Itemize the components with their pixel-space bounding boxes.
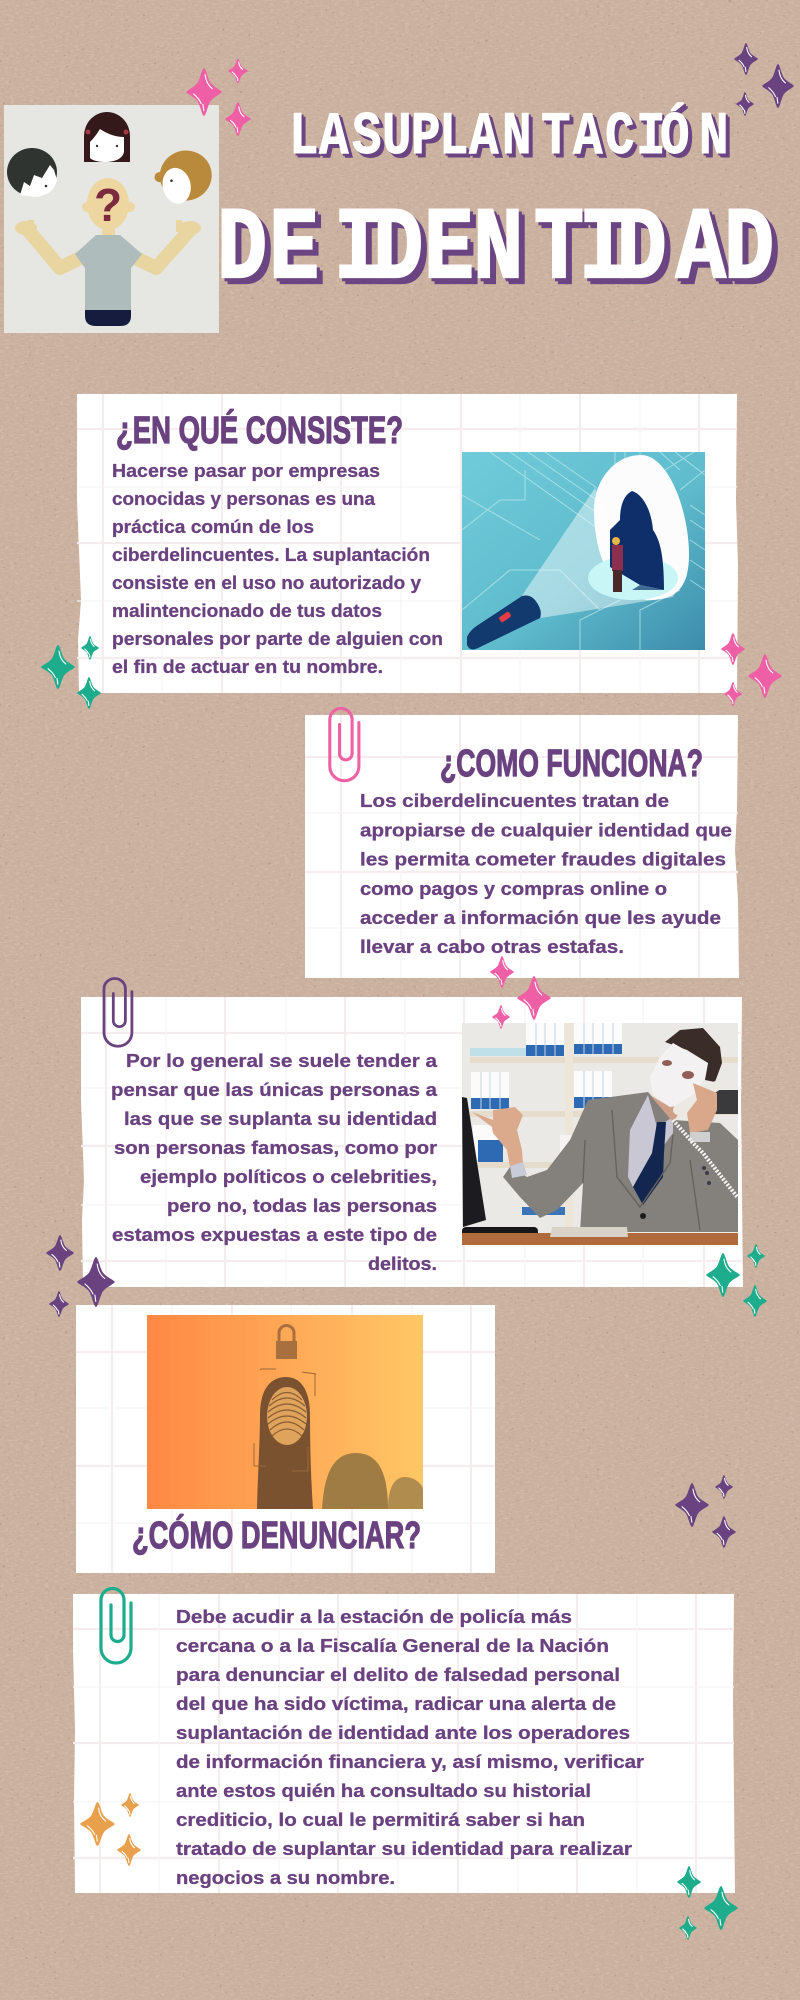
text block: Hacerse pasar por empresas [112, 460, 380, 481]
icon: right face [150, 146, 217, 207]
sparkles: green, card one left [41, 636, 101, 709]
text block: crediticio, lo cual le permitirá saber si han [176, 1809, 585, 1830]
icon: hands [15, 220, 201, 235]
text block: como pagos y compras online o [360, 878, 667, 899]
text block: de información financiera y, así mismo, verificar [176, 1751, 644, 1772]
illustration: flashlight revealing hooded figure [462, 445, 705, 650]
icon: arms [28, 230, 190, 268]
text block: conocidas y personas es una [112, 488, 376, 509]
photo: man in suit with white mask on the phone [462, 1023, 738, 1245]
text block [111, 1050, 438, 1274]
text block: el fin de actuar en tu nombre. [112, 656, 383, 677]
text block [112, 460, 443, 677]
text block: Los ciberdelincuentes tratan de [360, 790, 669, 811]
text block: consiste en el uso no autorizado y [112, 572, 422, 593]
sparkles: green, bottom [677, 1866, 738, 1940]
text block: cercana o a la Fiscalía General de la Nación [176, 1635, 609, 1656]
title line 1: LASUPLANTACIÓN [289, 102, 728, 172]
photo: fingerprint scan with padlock [147, 1315, 423, 1509]
text block: práctica común de los [112, 516, 314, 537]
text block: Debe acudir a la estación de policía más [176, 1606, 572, 1627]
sparkles: purple, left [46, 1235, 115, 1317]
illustration: person with question mark and three faces [4, 105, 219, 333]
sparkles: purple, lower right [675, 1475, 736, 1548]
panel: cómo denunciar [76, 1305, 495, 1573]
icon: torso [75, 235, 142, 310]
text block [360, 790, 732, 957]
text block: Por lo general se suele tender a [126, 1050, 438, 1071]
title line 2: DE IDENTIDAD [217, 193, 774, 309]
text block: pero no, todas las personas [167, 1195, 437, 1216]
text block: negocios a su nombre. [176, 1867, 395, 1888]
heading: ¿CÓMO DENUNCIAR? [132, 1513, 421, 1557]
text block: llevar a cabo otras estafas. [360, 936, 624, 957]
text block: del que ha sido víctima, radicar una alerta de [176, 1693, 616, 1714]
text block: les permita cometer fraudes digitales [360, 848, 726, 870]
sparkles: pink, middle [490, 956, 551, 1029]
text block: suplantación de identidad ante los operadores [176, 1722, 630, 1743]
text block: delitos. [368, 1253, 437, 1274]
icon: top face [84, 112, 130, 162]
sparkles: orange [80, 1793, 141, 1866]
icon: left face [7, 148, 57, 197]
panel: en qué consiste [77, 394, 738, 693]
panel: por lo general [81, 997, 743, 1287]
icon: head [82, 178, 135, 230]
icon: trousers [85, 310, 131, 326]
icon: green paper clip [101, 1588, 131, 1663]
sparkles: purple, top [734, 43, 794, 116]
text block: ante estos quién ha consultado su historial [176, 1780, 591, 1801]
text block [176, 1606, 644, 1888]
icon: neck [102, 225, 115, 241]
panel: debe acudir [73, 1594, 735, 1893]
sparkles: pink, card one right [721, 633, 782, 706]
text block: estamos expuestas a este tipo de [112, 1224, 437, 1245]
text block: acceder a información que les ayude [360, 907, 721, 928]
text block: ejemplo políticos o celebrities, [140, 1166, 437, 1187]
text block: personales por parte de alguien con [112, 628, 443, 649]
icon: question mark: ? [94, 179, 122, 231]
sparkles: pink, top [186, 58, 251, 136]
text block: son personas famosas, como por [114, 1137, 437, 1158]
sparkles: green, right [706, 1244, 767, 1317]
text block: ciberdelincuentes. La suplantación [112, 544, 430, 565]
icon: pink paper clip [330, 708, 359, 781]
icon: purple paper clip [104, 978, 132, 1046]
text block: pensar que las únicas personas a [111, 1079, 438, 1100]
heading: ¿EN QUÉ CONSISTE? [116, 408, 403, 452]
text block: las que se suplanta su identidad [124, 1108, 437, 1129]
panel: como funciona [305, 715, 739, 978]
text block: apropiarse de cualquier identidad que [360, 820, 732, 840]
text block: tratado de suplantar su identidad para realizar [176, 1838, 632, 1859]
text block: malintencionado de tus datos [112, 600, 382, 621]
text block: para denunciar el delito de falsedad personal [176, 1664, 620, 1685]
